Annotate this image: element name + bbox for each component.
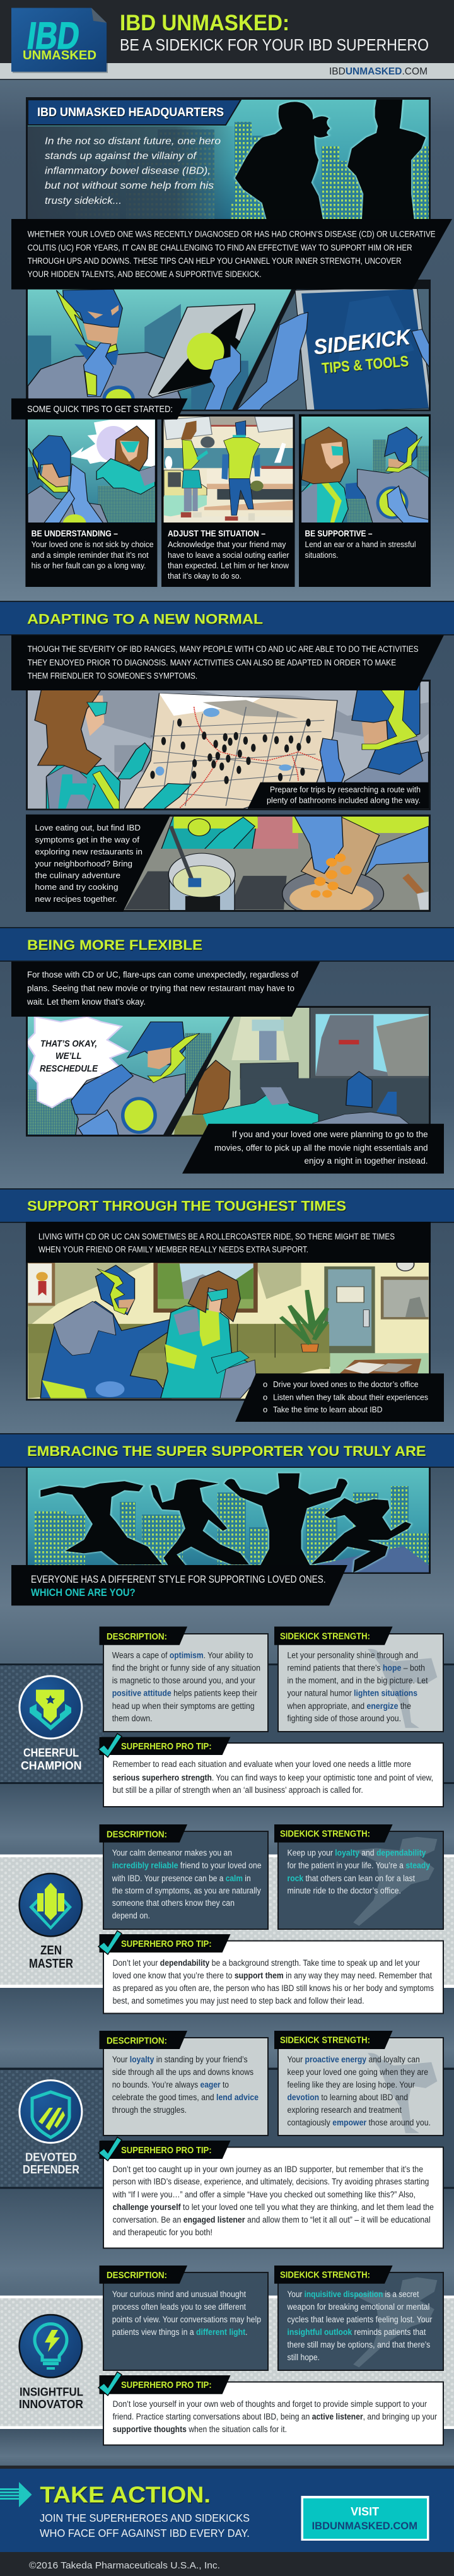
text box: flexible copy: wait. Let them know that’s okay. [26,997,146,1007]
footer: copyright: ©2016 Takeda Pharmaceuticals U.S.A., Inc. [29,2560,220,2571]
callout: which one are you: WHICH ONE ARE YOU? [31,1586,136,1598]
section band: support [0,1188,454,1223]
band: zen master [0,1855,454,1988]
callout: which one are you [11,1565,347,1605]
caption: cooking: symptoms get in the way of [35,835,139,844]
card: devoted sidekick strength [274,2031,443,2136]
list: ways to help: o [263,1393,267,1402]
figure: hero with map [320,680,429,783]
card: devoted pro tip: conversation. Be an engaged listener and allow them to “let it all out” – it will be educational [113,2215,431,2224]
kicker watermark [368,2053,437,2133]
card: insightful sidekick strength: SIDEKICK STRENGTH: [280,2269,370,2281]
callout: quick tips [11,398,188,420]
figure: hero on phone [71,1022,200,1137]
intro italic text: but not without some help from his [45,180,214,191]
silhouette: leaping hero [311,1498,411,1573]
label: insightful innovator [19,2385,83,2411]
intro italic text: In the not so distant future, one hero [45,136,221,147]
tablet text: SIDEKICK [312,325,413,360]
badge: insightful innovator [18,2314,83,2378]
logo: IBD [25,14,83,57]
couch [28,1324,330,1398]
text box: flexible copy: plans. Seeing that new movie or trying that new restaurant may have to [27,984,294,993]
caption: trips: Prepare for trips by researching a route with [270,785,421,795]
tip text: adjust the situation: that it’s okay to do so. [168,571,242,581]
card: insightful sidekick strength: weapon for breaking emotional or mental [287,2302,429,2312]
card: cheerful description: find the bright or funny side of any situation [112,1663,260,1672]
text box: intro copy [11,219,452,290]
card: cheerful sidekick strength: remind patients that there’s hope – both [288,1663,425,1672]
tip text: adjust the situation: Acknowledge that your friend may [168,540,286,549]
card: cheerful sidekick strength: in the moment, and in the big picture. Let [288,1676,428,1685]
silhouette: flexing hero [224,1474,347,1565]
window [381,1277,429,1320]
kicker watermark [368,1649,437,1728]
card: zen sidekick strength: rock that others can lean on for a last [288,1874,415,1883]
figure: hero bowling [221,421,264,521]
card: devoted description: through the struggles. [112,2105,187,2115]
caption: movie night: If you and your loved one were planning to go to the [232,1130,428,1139]
icon: road map [124,694,337,808]
speech burst text: WE’LL [55,1051,82,1061]
card: zen pro tip: Don’t let your dependability be a background strength. Take time to speak up and let your [113,1958,420,1968]
card: cheerful sidekick strength: your natural humor lighten situations [288,1689,417,1698]
tip text: be supportive: Lend an ear or a hand in stressful [305,540,416,549]
tablet text: TIPS & TOOLS [321,353,409,377]
label: zen master: MASTER [29,1957,73,1971]
card: devoted pro tip: SUPERHERO PRO TIP: [121,2145,212,2156]
card: cheerful sidekick strength: when appropriate, and energize the [287,1701,411,1711]
card: insightful description [100,2266,268,2370]
icon: television [310,1006,431,1080]
label: cheerful champion: CHEERFUL [23,1747,79,1759]
speech burst text: RESCHEDULE [40,1063,98,1074]
card: insightful description: patients view things in a different light. [112,2327,248,2337]
card: insightful sidekick strength [274,2266,443,2370]
label: devoted defender: DEFENDER [23,2163,79,2176]
intro italic text [45,136,221,206]
speech burst text: THAT’S OKAY, [40,1039,97,1049]
card: zen pro tip: SUPERHERO PRO TIP: [121,1939,212,1949]
label: insightful innovator: INNOVATOR [19,2398,83,2411]
card: cheerful description: DESCRIPTION: [107,1631,167,1642]
section band: support: SUPPORT THROUGH THE TOUGHEST TIMES [27,1198,346,1214]
tip text: be understanding [32,528,154,570]
figure: heroine [161,1271,256,1398]
card: cheerful pro tip: SUPERHERO PRO TIP: [121,1741,212,1752]
figure: hero [40,1265,185,1398]
panel: jumping silhouettes [26,1467,431,1574]
card: zen pro tip: loved one know that you’re there to support them in any way they may need. Remember that [113,1971,432,1980]
card: insightful pro tip: SUPERHERO PRO TIP: [121,2380,212,2390]
callout: quick tips: SOME QUICK TIPS TO GET STARTED: [27,404,173,415]
card: zen sidekick strength [274,1824,443,1929]
icon: tablet with emblem [148,304,255,411]
tip text: be understanding: BE UNDERSTANDING – [32,528,118,538]
text box: flexible copy [11,962,320,1017]
caption: movie night: movies, offer to pick up all the movie night essentials and [214,1143,428,1153]
tip text: be understanding: Your loved one is not sick by choice [32,540,154,549]
coffee table [340,1359,421,1373]
text box: adapting copy: THEY ENJOYED PRIOR TO DIAGNOSIS. MANY ACTIVITIES CAN ALSO BE ADAPTED IN ORDER TO MAKE [28,658,396,668]
title: IBD UNMASKED: [120,11,289,35]
banner: headquarters heading [28,100,241,125]
tip text: be supportive: BE SUPPORTIVE – [305,528,373,538]
card: devoted pro tip: Don’t get too caught up in your own journey as an IBD supporter, but remember that it’s the [113,2165,423,2174]
title [120,11,429,54]
right panel: movie night [171,1006,431,1139]
card: insightful sidekick strength: still hope. [288,2353,320,2362]
silhouette: hero [347,100,426,219]
figure: heroine bowling [181,421,214,517]
panel: tablet scene [25,280,432,413]
badge: devoted defender [18,2079,83,2144]
card: insightful sidekick strength: cycles that leave patients feeling lost. Your [288,2315,433,2324]
card: cheerful description: is magnetic to those around you, and your [112,1676,255,1685]
card: devoted sidekick strength: feeling like they are losing hope. Your [288,2080,415,2089]
card: cheerful description: positive attitude helps patients keep their [112,1689,257,1698]
label: devoted defender: DEVOTED [25,2151,77,2163]
panel: headquarters [26,97,431,221]
silhouette: running heroine [151,1479,249,1565]
card: zen sidekick strength: Keep up your loyalty and dependability [288,1848,426,1858]
label: devoted defender [23,2151,79,2176]
card: devoted sidekick strength: Your proactive energy and loyalty can [288,2055,420,2064]
banner: headquarters heading: IBD UNMASKED HEADQUARTERS [37,105,224,119]
section band: flexible: BEING MORE FLEXIBLE [27,937,202,953]
card: cheerful description: Wears a cape of optimism. Your ability to [112,1651,253,1660]
panel: be supportive [299,414,433,587]
card: devoted description: no bounds. You’re always eager to [112,2080,229,2089]
footer: take action [0,2466,454,2552]
card: cheerful sidekick strength: SIDEKICK STRENGTH: [280,1631,370,1642]
card: devoted pro tip [98,2137,443,2248]
section band: adapting: ADAPTING TO A NEW NORMAL [27,612,263,627]
card: zen description: Your calm demeanor makes you an [112,1848,232,1858]
figure: heroine [301,427,349,524]
card: cheerful pro tip [98,1734,443,1807]
call to action copy: JOIN THE SUPERHEROES AND SIDEKICKS [40,2512,250,2524]
kicker watermark [353,2278,437,2367]
tip text: be understanding: his or her fault can go a long way. [32,560,146,570]
silhouette: heroine [235,102,330,219]
list: ways to help: o [263,1380,267,1389]
panel: map scene [26,680,431,810]
text box: support copy: WHEN YOUR FRIEND OR FAMILY MEMBER REALLY NEEDS EXTRA SUPPORT. [38,1245,308,1255]
section band: embracing [0,1433,454,1468]
icon: left pot [168,826,235,912]
figures: couple on couch [174,1060,411,1137]
card: cheerful description [100,1627,268,1732]
caption: cooking: Love eating out, but find IBD [35,823,141,832]
card: cheerful description: head up when their symptoms are getting [112,1701,255,1711]
label: insightful innovator: INSIGHTFUL [20,2385,83,2398]
text box: support copy [26,1222,431,1263]
label: zen master: ZEN [40,1944,62,1958]
framed painting [153,1262,258,1313]
text box: adapting copy: THEM FRIENDLIER TO SOMEONE’S SYMPTOMS. [28,671,197,680]
figure: heroine on phone [96,426,155,494]
card: devoted description: celebrate the good times, and lend advice [112,2093,259,2102]
footer: copyright [0,2552,454,2576]
panel: adjust the situation [161,414,295,587]
card: insightful pro tip [98,2372,443,2445]
intro italic text: trusty sidekick... [45,196,122,206]
panel: be understanding [25,417,158,587]
card: insightful sidekick strength: Your inquisitive disposition is a secret [288,2289,419,2299]
figure: hero on phone [28,435,108,523]
card: devoted sidekick strength: devotion to learning about IBD and [288,2093,408,2102]
list: ways to help: Take the time to learn about IBD [273,1405,382,1414]
badge: zen master [18,1873,83,1937]
card: cheerful pro tip: Remember to read each situation and evaluate when your loved one needs a little more [113,1759,411,1769]
panel: movie scene [26,1006,431,1142]
card: zen sidekick strength: SIDEKICK STRENGTH: [280,1829,370,1839]
icon: check mark [98,1734,122,1757]
button: visit website: IBDUNMASKED.COM [311,2520,417,2532]
caption: cooking: the culinary adventure [35,870,120,880]
card: devoted sidekick strength: keep your loved one going when they are [288,2067,428,2077]
card: zen description: incredibly reliable friend to your loved one [112,1861,262,1870]
button: visit website: VISIT [351,2505,379,2518]
tip text: adjust the situation [168,528,289,581]
card: zen description: depend on. [112,1911,150,1920]
text box: intro copy: THROUGH UPS AND DOWNS. THESE TIPS CAN HELP YOU CHANNEL YOUR INNER STRENGTH, UNCOVER [28,256,402,266]
label: cheerful champion [21,1747,82,1772]
card: insightful sidekick strength: there still may be options, and that there’s [288,2340,431,2349]
label: zen master [29,1944,73,1971]
card: zen description [100,1824,268,1929]
list: ways to help: o [263,1405,267,1414]
card: zen description: DESCRIPTION: [107,1829,167,1840]
icon: right pot with vegetables [282,815,429,918]
caption: cooking: home and try cooking [35,882,119,892]
text box: support copy: LIVING WITH CD OR UC CAN SOMETIMES BE A ROLLERCOASTER RIDE, SO THERE MIGHT BE TIMES [38,1232,395,1241]
card: insightful sidekick strength: insightful outlook reminds patients that [288,2327,426,2337]
call to action heading: TAKE ACTION. [40,2481,211,2507]
figure: hero [28,289,182,399]
card: cheerful pro tip: but still be a pillar of strength when an ‘all business’ approach is called for. [113,1785,363,1795]
band: insightful innovator [0,2296,454,2429]
card: devoted pro tip: challenge yourself to let your loved one tell you what they are thinking, and let them lead the [113,2202,434,2212]
callout: which one are you: EVERYONE HAS A DIFFERENT STYLE FOR SUPPORTING LOVED ONES. [31,1573,326,1585]
icon: check mark [98,2137,122,2161]
card: zen description: someone that others know they can [112,1898,235,1908]
call to action copy: WHO FACE OFF AGAINST IBD EVERY DAY. [40,2527,250,2539]
header bar [0,0,454,80]
tip text: adjust the situation: have to leave a social outing earlier [168,550,289,560]
intro italic text: stands up against the villainy of [45,151,197,162]
card: insightful description: points of view. Your conversations may help [112,2315,261,2324]
card: insightful description: process often leads you to see different [112,2302,246,2312]
button: visit website [301,2496,429,2541]
panel: kitchen scene [26,815,431,918]
tip text: be supportive: situations. [305,550,338,560]
plant [281,1290,327,1352]
card: zen sidekick strength: for the patient in your life. You’re a steady [288,1861,430,1870]
intro italic text: inflammatory bowel disease (IBD), [45,166,211,177]
card: insightful pro tip: friend. Practice starting conversations about IBD, being an active listener, and bringing up your [113,2412,437,2421]
card: devoted description [100,2031,268,2136]
list: ways to help: Listen when they talk about their experiences [273,1393,428,1402]
label: cheerful champion: CHAMPION [21,1759,82,1772]
caption: movie night [182,1124,444,1174]
card: devoted pro tip: and therapeutic for you both! [113,2228,212,2237]
list: ways to help [235,1373,444,1422]
section band: flexible [0,927,454,962]
card: cheerful sidekick strength: fighting side of those around you. [288,1714,401,1723]
card: devoted pro tip: with “If I were you…” and offer a simple “Have you checked out something like this?” Also, [112,2190,416,2199]
badge: cheerful champion [18,1675,83,1739]
card: devoted description: Your loyalty in standing by your friend’s [112,2055,248,2064]
card: zen description: with IBD. Your presence can be a calm in [112,1874,251,1883]
door [324,1267,375,1357]
caption: trips [248,783,429,808]
panel: doctor's office scene [26,1257,431,1402]
card: devoted sidekick strength: contagiously empower those around you. [288,2118,431,2127]
caption: cooking: exploring new restaurants in [35,847,143,856]
tip text: be supportive [305,528,416,560]
certificate [28,1262,55,1306]
text box: intro copy: YOUR HIDDEN TALENTS, AND BECOME A SUPPORTIVE SIDEKICK. [28,269,262,279]
tip text: adjust the situation: than expected. Let him or her know [168,560,289,570]
caption: movie night: enjoy a night in together instead. [304,1156,428,1166]
band: cheerful champion [0,1663,454,1784]
card: insightful pro tip: Don’t lose yourself in your own web of thoughts and forget to provide simple support to your [113,2399,427,2409]
caption: cooking: your neighborhood? Bring [35,859,132,868]
card: devoted description: DESCRIPTION: [107,2036,167,2047]
card: zen sidekick strength: minute ride to the doctor’s office. [288,1886,401,1896]
website url: IBDUNMASKED.COM [329,66,428,77]
caption: trips: plenty of bathrooms included along the way. [267,795,421,805]
call to action copy [40,2512,250,2539]
band: devoted defender [0,2067,454,2189]
logo [11,8,108,73]
card: cheerful pro tip: serious superhero strength. You can find ways to keep your optimistic tone and point of view, [113,1773,433,1782]
card: insightful description: Your curious mind and unusual thought [112,2289,246,2299]
section band: embracing: EMBRACING THE SUPER SUPPORTER YOU TRULY ARE [27,1443,426,1459]
card: devoted sidekick strength: SIDEKICK STRENGTH: [280,2035,370,2046]
icon: arrow [0,2482,32,2507]
card: cheerful description: them down. [112,1714,153,1723]
card: insightful description: DESCRIPTION: [107,2270,167,2281]
card: insightful pro tip: supportive thoughts when the situation calls for it. [113,2425,287,2434]
tip text: be understanding: and a simple reminder that it’s not [32,550,149,560]
figure: hero thumbs up [346,427,429,524]
logo: UNMASKED [23,49,96,62]
caption: cooking [35,823,143,904]
card: cheerful sidekick strength: Let your personality shine through and [288,1651,418,1660]
tablet text [312,325,413,377]
card: zen pro tip [98,1931,443,2013]
speech burst text [40,1039,98,1074]
icon: check mark [98,2372,122,2396]
list: ways to help: Drive your loved ones to the doctor’s office [273,1380,419,1389]
card: devoted description: side through all the ups and downs knows [112,2067,253,2077]
card: zen description: the storm of symptoms, as you are naturally [112,1886,261,1896]
left panel: hero rescheduling [26,1015,235,1142]
kicker watermark [353,1837,437,1926]
card: zen pro tip: best, and sometimes you may just need to step back and follow their lead. [113,1996,364,2006]
icon: check mark [98,1931,122,1954]
section band: adapting [0,601,454,635]
figure: heroine with map [35,680,191,810]
tip text: adjust the situation: ADJUST THE SITUATION – [168,528,265,538]
silhouette: clawed hero [40,1481,162,1564]
text box: flexible copy: For those with CD or UC, flare-ups can come unexpectedly, regardless of [27,970,298,979]
caption: cooking: new recipes together. [35,894,117,904]
card: cheerful sidekick strength [274,1627,443,1732]
text box: adapting copy [11,635,444,690]
card: devoted sidekick strength: exploring research and treatment [288,2105,402,2115]
